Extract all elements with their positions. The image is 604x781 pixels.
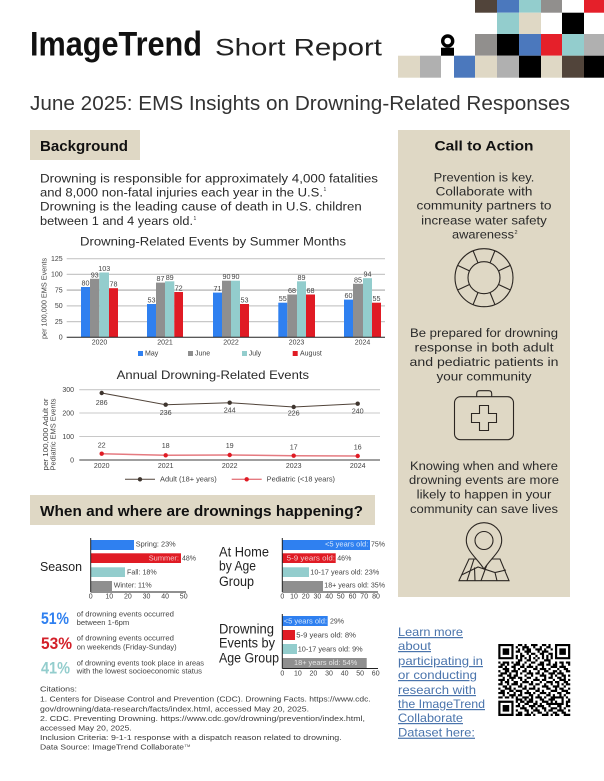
pediatric series [98, 441, 362, 458]
label: At Home by Age Group: At Home [219, 545, 269, 560]
bar chart: drowning events by age group [280, 614, 380, 678]
text: prevention: community partners to [416, 199, 552, 213]
bar chart: at home by age group: 70 [360, 594, 368, 600]
text: prevention: Prevention is key. [434, 171, 534, 185]
bar chart: Drowning-Related Events by Summer Months: 90 [222, 272, 230, 281]
bar chart: Drowning-Related Events by Summer Months: 2021 [157, 340, 173, 346]
bar chart: at home by age group [280, 538, 385, 600]
bar chart: at home by age group: 0 [280, 594, 284, 600]
bar chart: Drowning-Related Events by Summer Months: 72 [175, 284, 183, 292]
bar chart: season: 30 [143, 594, 150, 600]
icon: life ring [455, 249, 513, 307]
bar chart: drowning events by age group: 29% [330, 617, 344, 626]
bar chart: Drowning-Related Events by Summer Months: 0 [59, 335, 63, 342]
legend: Adult (18+ years) [160, 475, 217, 484]
link: Learn more: Collaborate [398, 711, 463, 725]
icon: map pin [459, 523, 509, 581]
bar chart: Drowning-Related Events by Summer Months: 90 [232, 272, 240, 281]
citations: accessed May 20, 2025. [40, 724, 132, 733]
bar chart: at home by age group: 50 [337, 594, 345, 600]
bar chart: Drowning-Related Events by Summer Months: 125 [51, 256, 63, 263]
bar chart: at home by age group: 18+ years old: 35% [324, 581, 385, 590]
legend: Pediatric (<18 years) [267, 475, 335, 484]
label: Drowning Events by Age Group [219, 622, 279, 666]
text: be prepared: Be prepared for drowning [410, 326, 558, 340]
text: prevention: increase water safety [421, 213, 548, 227]
adult series: 236 [160, 408, 172, 417]
stat: 51% [41, 610, 174, 628]
icon: QR code [498, 644, 570, 716]
stat: 53% [41, 634, 177, 653]
bar chart: season: 10 [105, 594, 113, 600]
stat: 53%: on weekends (Friday-Sunday) [77, 643, 177, 652]
bar chart: at home by age group: 30 [314, 594, 321, 600]
bar chart: season: 48% [182, 554, 196, 563]
label: Drowning Events by Age Group: Events by [219, 636, 275, 651]
bar chart: Drowning-Related Events by Summer Months: 103 [98, 264, 110, 273]
bar chart: Drowning-Related Events by Summer Months [40, 235, 385, 358]
text: prevention: awareness [452, 228, 514, 242]
text block: background: Drowning is responsible for approximately 4,000 fatalities [40, 171, 378, 185]
bar chart: season: Spring: 23% [136, 540, 176, 549]
citations: Citations: [40, 685, 77, 694]
bar chart: drowning events by age group: 10 [294, 670, 302, 678]
link: Learn more: or conducting [398, 668, 477, 682]
line chart: Annual Drowning-Related Events: 200 [62, 410, 74, 418]
bar chart: Drowning-Related Events by Summer Months: 2022 [223, 340, 239, 346]
link: Learn more: participating in [398, 654, 483, 668]
bar chart: season: Fall: 18% [127, 568, 157, 577]
heading: When and where are drownings happening?: When and where are drownings happening? [40, 504, 363, 520]
text block: background: 1 [194, 216, 196, 222]
stat: 51%: 51% [41, 610, 69, 628]
pediatric series: 19 [226, 441, 234, 450]
bar chart: Drowning-Related Events by Summer Months: 60 [344, 291, 352, 300]
bar chart: Drowning-Related Events by Summer Months: 55 [279, 294, 287, 303]
bar chart: Drowning-Related Events by Summer Months: 68 [288, 286, 296, 295]
bar chart: drowning events by age group: <5 years old: [284, 617, 327, 626]
line chart: Annual Drowning-Related Events: 2023 [286, 463, 302, 470]
bar chart: drowning events by age group: 60 [372, 670, 380, 678]
pediatric series: 17 [290, 443, 298, 452]
stat: 41%: of drowning events took place in areas [77, 658, 204, 667]
bar chart: season: 20 [124, 594, 132, 600]
legend [138, 351, 322, 358]
bar chart: drowning events by age group: 30 [325, 670, 333, 678]
chart title: Drowning-Related Events by Summer Months [80, 235, 346, 249]
line chart: Annual Drowning-Related Events [41, 368, 380, 484]
bar chart: season: Summer: [149, 554, 179, 563]
bar chart: Drowning-Related Events by Summer Months: 2024 [355, 340, 370, 346]
label: At Home by Age Group [219, 545, 269, 589]
bar chart: Drowning-Related Events by Summer Months: 87 [156, 274, 164, 283]
legend [125, 475, 335, 484]
text: prevention [416, 171, 552, 242]
adult series: 286 [96, 398, 108, 407]
y axis title: per 100,000 EMS Events [40, 258, 48, 339]
line chart: Annual Drowning-Related Events: 300 [62, 387, 74, 394]
bar chart: Drowning-Related Events by Summer Months: 53 [148, 296, 156, 304]
line chart: Annual Drowning-Related Events: 2020 [94, 463, 110, 470]
bar chart: at home by age group: 46% [337, 554, 352, 563]
bar chart: Drowning-Related Events by Summer Months: 94 [364, 270, 372, 279]
bar chart: Drowning-Related Events by Summer Months: 89 [166, 273, 174, 282]
bar chart: Drowning-Related Events by Summer Months: 75 [55, 287, 63, 294]
citations: gov/drowning/data-research/facts/index.html, accessed May 20, 2025. [40, 705, 309, 714]
citations: 1. Centers for Disease Control and Prevention (CDC). Drowning Facts. https://www.cdc. [40, 695, 371, 704]
line chart: Annual Drowning-Related Events: 100 [62, 434, 74, 441]
bar chart: at home by age group: <5 years old: [325, 540, 368, 549]
y axis title: Pediatric EMS Events [49, 398, 58, 470]
text block: background [40, 171, 378, 228]
stat: 51%: between 1-6pm [77, 618, 129, 627]
text: be prepared [410, 326, 559, 384]
text: prevention: 2 [514, 230, 518, 236]
bar chart: Drowning-Related Events by Summer Months: 2020 [92, 340, 107, 346]
text: knowing when and where: drowning events are more [409, 473, 559, 487]
legend: August [300, 351, 322, 358]
heading: Background: Background [40, 139, 128, 155]
bar chart: drowning events by age group: 20 [310, 670, 317, 678]
stat: 41%: with the lowest socioeconomic status [76, 667, 202, 676]
label: Drowning Events by Age Group: Drowning [219, 622, 274, 637]
bar chart: season: 0 [89, 594, 93, 600]
bar chart: season: 40 [161, 594, 169, 600]
line chart: Annual Drowning-Related Events: 2021 [158, 463, 174, 470]
stat: 41% [41, 658, 204, 678]
bar chart: Drowning-Related Events by Summer Months: 78 [110, 280, 118, 289]
bar chart: Drowning-Related Events by Summer Months: 50 [55, 303, 63, 310]
link: Learn more: Dataset here: [398, 726, 475, 740]
adult series: 240 [352, 407, 364, 416]
text block: background: between 1 and 4 years old. [40, 214, 193, 228]
chart title: Annual Drowning-Related Events [117, 368, 309, 382]
bar chart: drowning events by age group: 0 [280, 670, 284, 678]
legend: June [195, 351, 210, 358]
bar chart: drowning events by age group: 5-9 years old: 8% [296, 631, 356, 640]
heading: Background [30, 130, 140, 160]
decorative pixel mosaic with pin [398, 0, 604, 78]
bar chart: season: 50 [180, 594, 188, 600]
bar chart: Drowning-Related Events by Summer Months: 25 [55, 319, 63, 326]
citations: Inclusion Criteria: 9-1-1 response with a dispatch reason related to drowning. [40, 733, 342, 742]
bar chart: drowning events by age group: 18+ years old: 54% [294, 658, 358, 667]
citations [40, 685, 371, 752]
y axis title [41, 398, 58, 470]
stat: 53%: of drowning events occurred [77, 634, 174, 643]
panel heading: Call to Action [434, 138, 534, 154]
bar chart: Drowning-Related Events by Summer Months: 71 [214, 284, 222, 293]
label: At Home by Age Group: Group [219, 574, 254, 589]
citations: Data Source: ImageTrend Collaborate [40, 743, 184, 752]
text block: background: 1 [324, 187, 326, 193]
bar chart: season: Winter: 11% [114, 581, 152, 590]
label: At Home by Age Group: by Age [219, 559, 256, 574]
stat: 53%: 53% [41, 635, 72, 653]
stat: 51%: of drowning events occurred [77, 610, 174, 619]
bar chart: at home by age group: 40 [325, 594, 333, 600]
bar chart: drowning events by age group: 50 [356, 670, 364, 678]
bar chart: Drowning-Related Events by Summer Months: 2023 [289, 340, 304, 346]
pediatric series: 16 [354, 443, 362, 452]
pediatric series: 22 [98, 441, 106, 450]
text block: background: and 8,000 non-fatal injuries each year in the U.S. [40, 185, 323, 199]
link: Learn more: about [398, 639, 432, 653]
text: knowing when and where: likely to happen in your [417, 488, 551, 502]
text: knowing when and where: Knowing when and where [410, 459, 558, 473]
text: knowing when and where: community can save lives [410, 502, 558, 516]
text: prevention: Collaborate with [436, 185, 533, 199]
text: be prepared: response in both adult [414, 340, 554, 354]
link: Learn more: the ImageTrend [398, 697, 485, 711]
line chart: Annual Drowning-Related Events: 2022 [222, 463, 238, 470]
link: Learn more: research with [398, 683, 476, 697]
title: June 2025: EMS Insights on Drowning-Related Responses [30, 93, 570, 115]
adult series: 226 [288, 409, 300, 418]
bar chart: at home by age group: 60 [349, 594, 356, 600]
text block: background: Drowning is the leading cause of death in U.S. children [40, 199, 362, 213]
icon: first aid kit [454, 391, 514, 440]
bar chart: Drowning-Related Events by Summer Months: 68 [306, 286, 314, 295]
legend: May [145, 351, 159, 358]
text: knowing when and where [409, 459, 559, 516]
stat: 41%: 41% [41, 660, 70, 678]
logo: ImageTrend: ImageTrend [30, 26, 202, 64]
link: Learn more: Learn more [398, 625, 463, 639]
line chart: Annual Drowning-Related Events: 0 [70, 458, 74, 464]
pediatric series: 18 [162, 441, 170, 450]
panel: Call to Action [398, 130, 570, 597]
y axis title: per 100,000 Adult or [41, 398, 50, 470]
heading: Short Report: Short Report [215, 35, 382, 62]
citations: TM [184, 743, 190, 748]
bar chart: Drowning-Related Events by Summer Months: 89 [298, 273, 306, 282]
legend: July [249, 351, 262, 358]
bar chart: at home by age group: 10 [290, 594, 298, 600]
text: be prepared: and pediatric patients in [410, 355, 559, 369]
bar chart: drowning events by age group: 40 [341, 670, 349, 678]
label: Season: Season [40, 559, 82, 574]
link: Learn more [398, 625, 485, 740]
bar chart: Drowning-Related Events by Summer Months: 55 [372, 294, 380, 303]
heading: When and where are drownings happening? [30, 495, 375, 525]
bar chart: at home by age group: 5-9 years old: [287, 554, 335, 563]
bar chart: Drowning-Related Events by Summer Months: 53 [240, 296, 248, 304]
citations: 2. CDC. Preventing Drowning. https://www.cdc.gov/drowning/prevention/index.html, [40, 714, 365, 723]
bar chart: Drowning-Related Events by Summer Months: 85 [354, 275, 362, 284]
bar chart: Drowning-Related Events by Summer Months: 100 [51, 272, 63, 279]
bar chart: at home by age group: 75% [371, 540, 385, 549]
bar chart: drowning events by age group: 10-17 years old: 9% [298, 645, 363, 654]
bar chart: at home by age group: 10-17 years old: 23% [310, 568, 380, 577]
adult series [96, 391, 364, 418]
adult series: 244 [224, 406, 236, 415]
bar chart: season [89, 538, 196, 600]
label: Drowning Events by Age Group: Age Group [219, 651, 279, 666]
bar chart: at home by age group: 80 [372, 594, 380, 600]
text: be prepared: your community [436, 370, 532, 384]
bar chart: Drowning-Related Events by Summer Months: 80 [82, 278, 90, 288]
line chart: Annual Drowning-Related Events: 2024 [350, 463, 366, 470]
bar chart: at home by age group: 20 [302, 594, 310, 600]
bar chart: Drowning-Related Events by Summer Months: 93 [91, 270, 99, 279]
